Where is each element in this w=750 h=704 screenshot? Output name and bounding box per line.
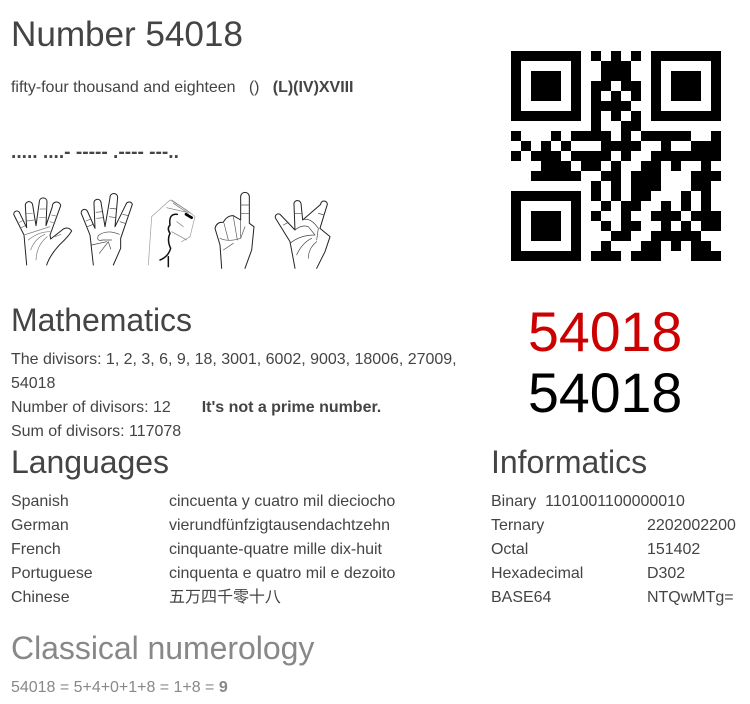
table: languages: cinquenta e quatro mil e dezoito bbox=[169, 565, 395, 582]
icon: sign language hands bbox=[13, 192, 330, 269]
table: languages: German bbox=[11, 517, 69, 534]
table: informatics: Hexadecimal bbox=[491, 565, 583, 582]
table: informatics: D302 bbox=[647, 565, 685, 582]
text block: numerology: 54018 = 5+4+0+1+8 = 1+8 = 9 bbox=[11, 679, 228, 696]
table: informatics: BASE64 bbox=[491, 589, 551, 606]
table: languages: Portuguese bbox=[11, 565, 93, 582]
table: informatics: Ternary bbox=[491, 517, 544, 534]
text block: divisors: 54018 bbox=[11, 375, 55, 392]
heading: Classical numerology: Classical numerology bbox=[11, 630, 314, 666]
number in words and roman numeral: fifty-four thousand and eighteen () (L)(IV)XVIII bbox=[11, 79, 353, 96]
title: Number 54018 bbox=[11, 15, 243, 54]
table: informatics: Binary 1101001100000010 bbox=[491, 493, 685, 510]
QR code bbox=[511, 51, 721, 261]
table: informatics: 151402 bbox=[647, 541, 700, 558]
morse code: ..... ....- ----- .---- ---.. bbox=[11, 142, 179, 163]
text block: divisors: Number of divisors: 12 It's not a prime number. bbox=[11, 399, 381, 416]
table: informatics: NTQwMTg= bbox=[647, 589, 734, 606]
big number red: 54018 bbox=[528, 301, 682, 363]
heading: Informatics: Informatics bbox=[491, 444, 647, 480]
table: languages bbox=[11, 493, 395, 606]
table: informatics: 2202002200 bbox=[647, 517, 736, 534]
table: languages: Spanish bbox=[11, 493, 69, 510]
heading: Languages: Languages bbox=[11, 444, 169, 480]
table: languages: 五万四千零十八 bbox=[169, 589, 281, 606]
text block: divisors: The divisors: 1, 2, 3, 6, 9, 18, 3001, 6002, 9003, 18006, 27009, bbox=[11, 351, 457, 368]
big number black: 54018 bbox=[528, 362, 682, 424]
text block: divisors: Sum of divisors: 117078 bbox=[11, 423, 181, 440]
table: informatics bbox=[491, 493, 736, 606]
table: languages: French bbox=[11, 541, 61, 558]
heading: Mathematics: Mathematics bbox=[11, 302, 192, 338]
table: languages: vierundfünfzigtausendachtzehn bbox=[169, 517, 390, 534]
table: informatics: Octal bbox=[491, 541, 528, 558]
text block: divisors bbox=[11, 351, 457, 440]
table: languages: Chinese bbox=[11, 589, 70, 606]
table: languages: cincuenta y cuatro mil dieciocho bbox=[169, 493, 395, 510]
table: languages: cinquante-quatre mille dix-huit bbox=[169, 541, 382, 558]
